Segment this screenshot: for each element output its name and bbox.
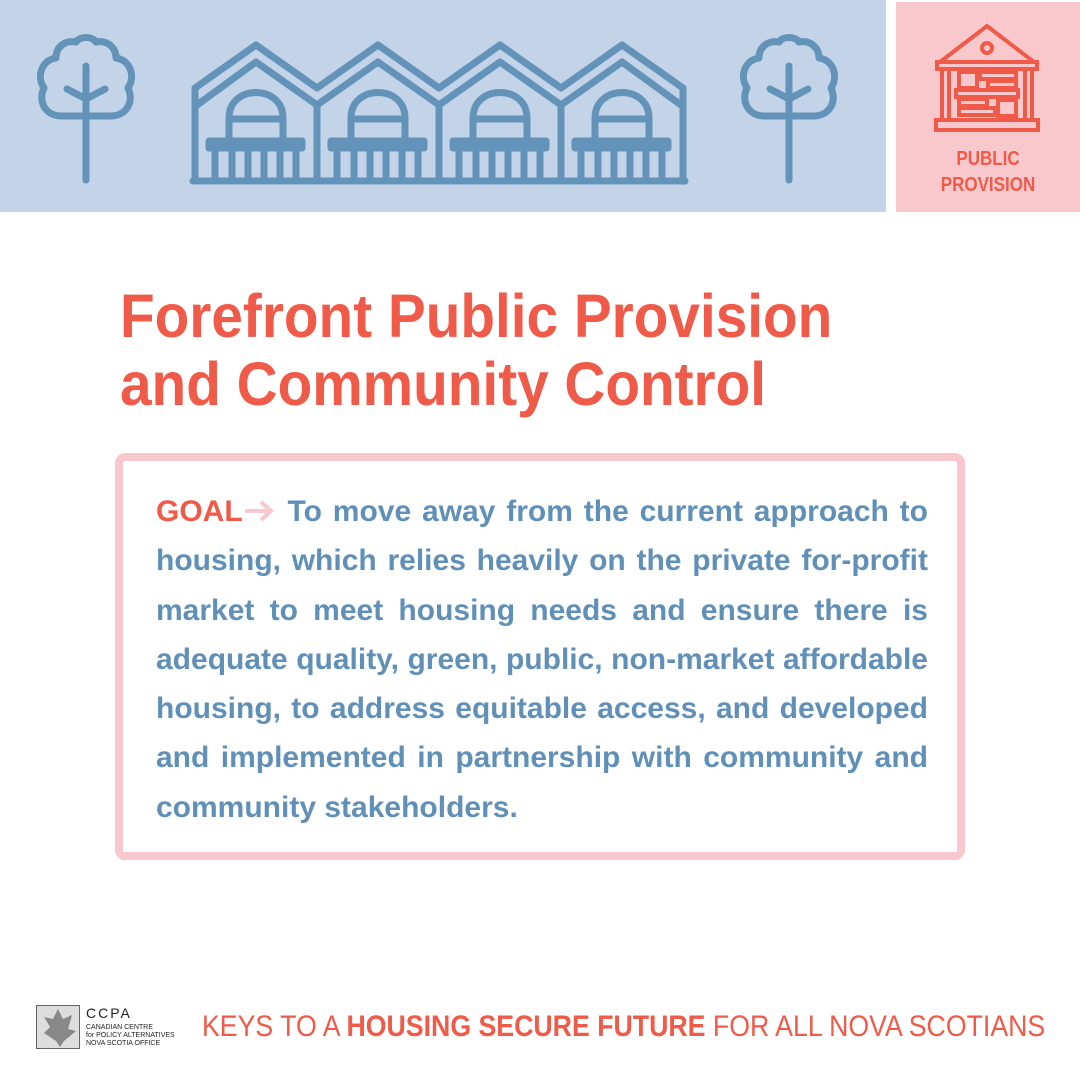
logo: CCPA: for POLICY ALTERNATIVES [86, 1032, 175, 1039]
icon: public building [934, 24, 1040, 132]
icon: row of four houses [193, 45, 685, 181]
tag label: PUBLIC [956, 148, 1020, 170]
tag label [941, 148, 1035, 196]
title: Forefront Public Provision [120, 282, 832, 350]
goal text: market to meet housing needs and ensure there is [156, 594, 928, 627]
logo: CCPA: CANADIAN CENTRE [86, 1024, 153, 1031]
logo: CCPA [36, 1005, 175, 1049]
goal text: community stakeholders. [156, 791, 518, 824]
category tag panel: public provision [896, 2, 1080, 212]
title [120, 282, 832, 418]
goal text: housing, to address equitable access, and developed [156, 692, 928, 725]
goal box [115, 453, 965, 860]
goal text: and implemented in partnership with community and [156, 741, 928, 774]
goal text: GOAL To move away from the current approach to [156, 495, 928, 528]
title: and Community Control [120, 350, 766, 418]
goal text [156, 495, 928, 824]
icon: right tree [743, 38, 835, 180]
logo: CCPA: NOVA SCOTIA OFFICE [86, 1040, 160, 1047]
icon: maple leaf box [36, 1005, 80, 1049]
logo: CCPA: CCPA [86, 1005, 132, 1021]
goal text: housing, which relies heavily on the private for-profit [156, 544, 928, 577]
goal text: adequate quality, green, public, non-market affordable [156, 643, 928, 676]
footer tagline: KEYS TO A HOUSING SECURE FUTURE FOR ALL NOVA SCOTIANS [202, 1010, 1045, 1043]
header panel: blue banner with houses and trees [0, 0, 886, 212]
tag label: PROVISION [941, 174, 1035, 196]
icon: left tree [40, 38, 132, 180]
